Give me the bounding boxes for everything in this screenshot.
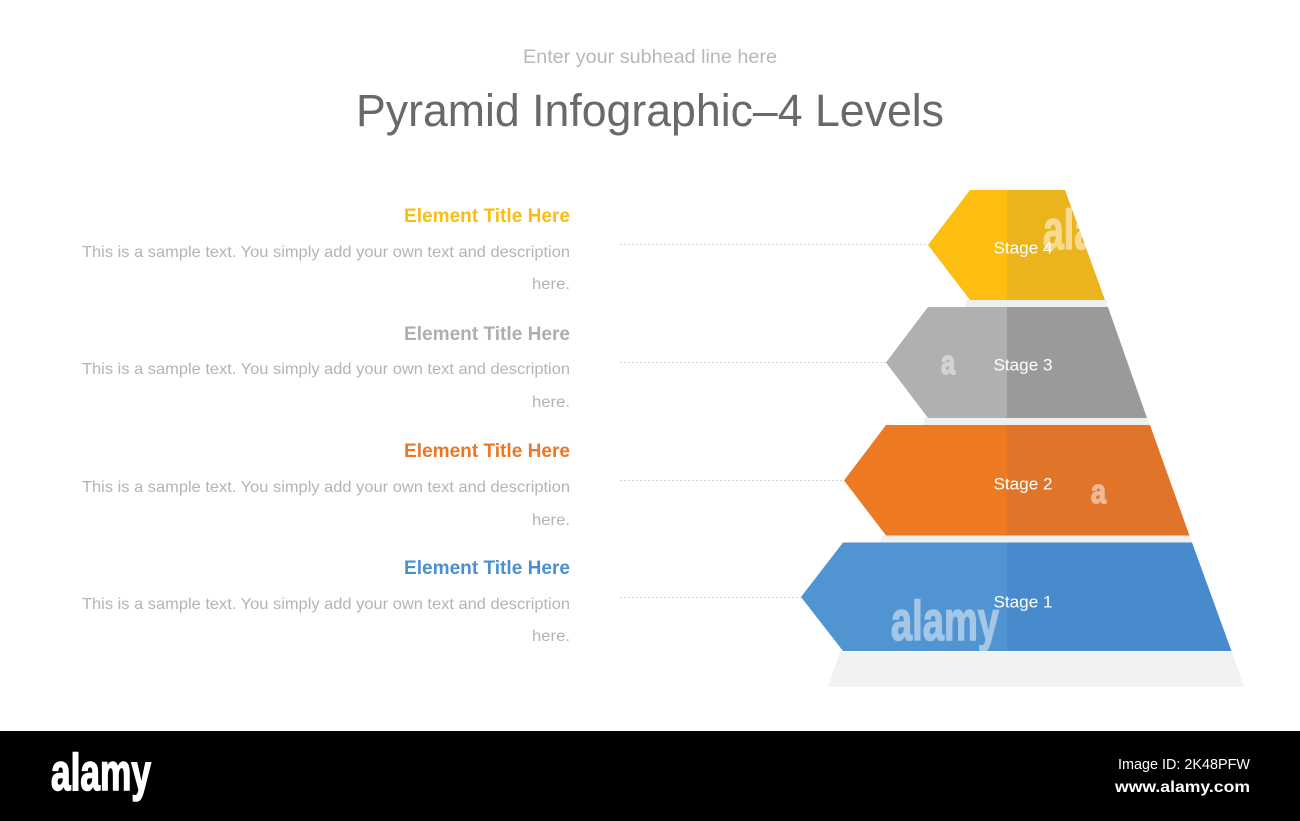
subhead: Enter your subhead line here <box>523 46 777 68</box>
text block: element 1 <box>82 558 570 645</box>
watermark fragments <box>891 198 1107 652</box>
text block: element 4: here. <box>532 276 570 293</box>
stage labels: Stage 3 <box>994 356 1052 374</box>
watermark fragments: a <box>1091 473 1107 511</box>
text block: element 4: Element Title Here <box>404 206 570 227</box>
pyramid level: stage 1 <box>801 542 1232 651</box>
pyramid level: stage 4 <box>928 190 1105 300</box>
text block: element 4 <box>82 206 570 293</box>
watermark fragments: a <box>941 344 956 382</box>
watermark fragments: alamy <box>891 589 999 652</box>
text block: element 1: Element Title Here <box>404 558 570 579</box>
stage labels: Stage 4 <box>994 240 1052 258</box>
text block: element 3: This is a sample text. You simply add your own text and description <box>82 361 570 378</box>
footer bar <box>0 731 1300 821</box>
text block: element 2: here. <box>532 512 570 529</box>
stage labels: Stage 1 <box>994 594 1052 612</box>
text block: element 2: Element Title Here <box>404 441 570 462</box>
image id: Image ID: 2K48PFW <box>1118 757 1250 773</box>
watermark fragments: ala <box>1043 198 1096 261</box>
text block: element 3: here. <box>532 394 570 411</box>
text block: element 3: Element Title Here <box>404 324 570 345</box>
text block: element 2: This is a sample text. You simply add your own text and description <box>82 479 570 496</box>
pyramid base shadow <box>828 300 1244 687</box>
website: www.alamy.com <box>1114 779 1250 796</box>
text block: element 3 <box>82 324 570 411</box>
stage labels <box>994 240 1052 612</box>
stage labels: Stage 2 <box>994 476 1052 494</box>
text block: element 2 <box>82 441 570 529</box>
text block: element 4: This is a sample text. You simply add your own text and description <box>82 244 570 261</box>
footer logo: alamy <box>51 744 151 802</box>
text block: element 1: This is a sample text. You simply add your own text and description <box>82 596 570 613</box>
text block: element 1: here. <box>532 628 570 645</box>
pyramid level: stage 2 <box>844 425 1190 536</box>
connector lines <box>620 244 928 598</box>
title: Pyramid Infographic–4 Levels <box>356 85 944 136</box>
pyramid level: stage 3 <box>886 307 1147 418</box>
